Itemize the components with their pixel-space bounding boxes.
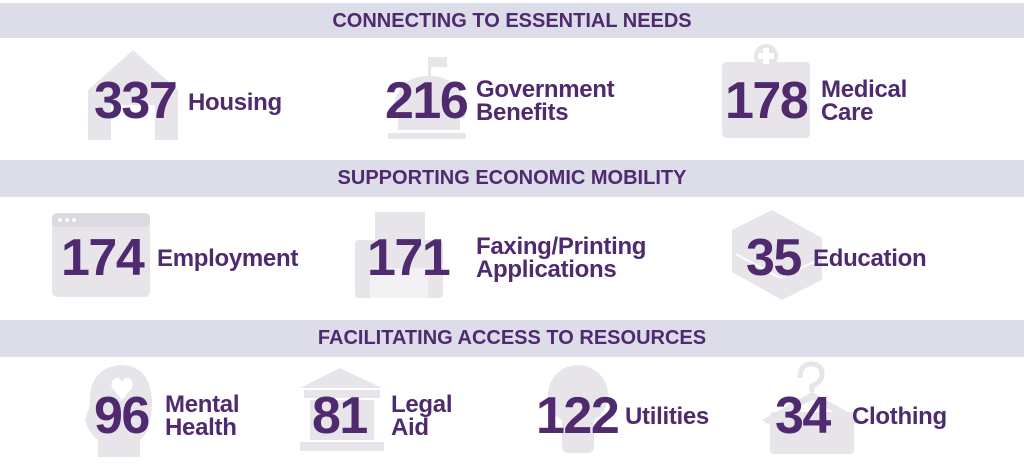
band: connecting to essential needs: CONNECTING TO ESSENTIAL NEEDS <box>332 10 692 32</box>
stat: 216: 216 <box>385 72 467 130</box>
band: connecting to essential needs <box>0 3 1024 38</box>
label: faxing/printing applications <box>476 233 646 283</box>
label: medical care: Care <box>821 99 873 126</box>
stat: 171: 171 <box>367 229 449 287</box>
label: medical care: Medical <box>821 76 907 103</box>
stat: 81: 81 <box>312 387 367 445</box>
stat: 122: 122 <box>536 387 618 445</box>
label: mental health: Health <box>165 414 237 441</box>
label: faxing/printing applications: Faxing/Printing <box>476 233 646 260</box>
icon: head <box>85 365 152 457</box>
band: facilitating access to resources <box>0 320 1024 357</box>
label: employment: Employment <box>157 245 298 272</box>
band: supporting economic mobility <box>0 160 1024 197</box>
label: mental health: Mental <box>165 391 239 418</box>
label: medical care <box>821 76 907 126</box>
label: government benefits: Government <box>476 76 614 103</box>
label: mental health <box>165 391 239 441</box>
stat: 34: 34 <box>775 387 830 445</box>
icon: hanger <box>762 364 862 454</box>
stat: 178: 178 <box>725 72 807 130</box>
label: government benefits: Benefits <box>476 99 568 126</box>
icon: books <box>732 210 822 300</box>
band: facilitating access to resources: FACILITATING ACCESS TO RESOURCES <box>318 327 706 349</box>
icon: courthouse <box>300 368 384 451</box>
label: education: Education <box>813 245 926 272</box>
label: legal aid: Legal <box>391 391 452 418</box>
label: utilities: Utilities <box>625 403 709 430</box>
label: government benefits <box>476 76 614 126</box>
icon: government building <box>388 57 466 139</box>
icon: browser window <box>52 213 150 297</box>
band: supporting economic mobility: SUPPORTING ECONOMIC MOBILITY <box>338 167 686 189</box>
stat: 96: 96 <box>94 387 149 445</box>
stat: 174: 174 <box>61 229 143 287</box>
icon: lightbulb <box>548 365 608 453</box>
label: clothing: Clothing <box>852 403 947 430</box>
icon: medical <box>722 44 810 138</box>
icon: house <box>88 50 178 140</box>
stat: 337 housing: 337 <box>94 72 176 130</box>
label: housing: Housing <box>188 89 282 116</box>
stat: 35: 35 <box>746 229 801 287</box>
label: legal aid: Aid <box>391 414 429 441</box>
label: legal aid <box>391 391 452 441</box>
icon: fax/printer <box>355 212 443 298</box>
label: faxing/printing applications: Applications <box>476 256 616 283</box>
